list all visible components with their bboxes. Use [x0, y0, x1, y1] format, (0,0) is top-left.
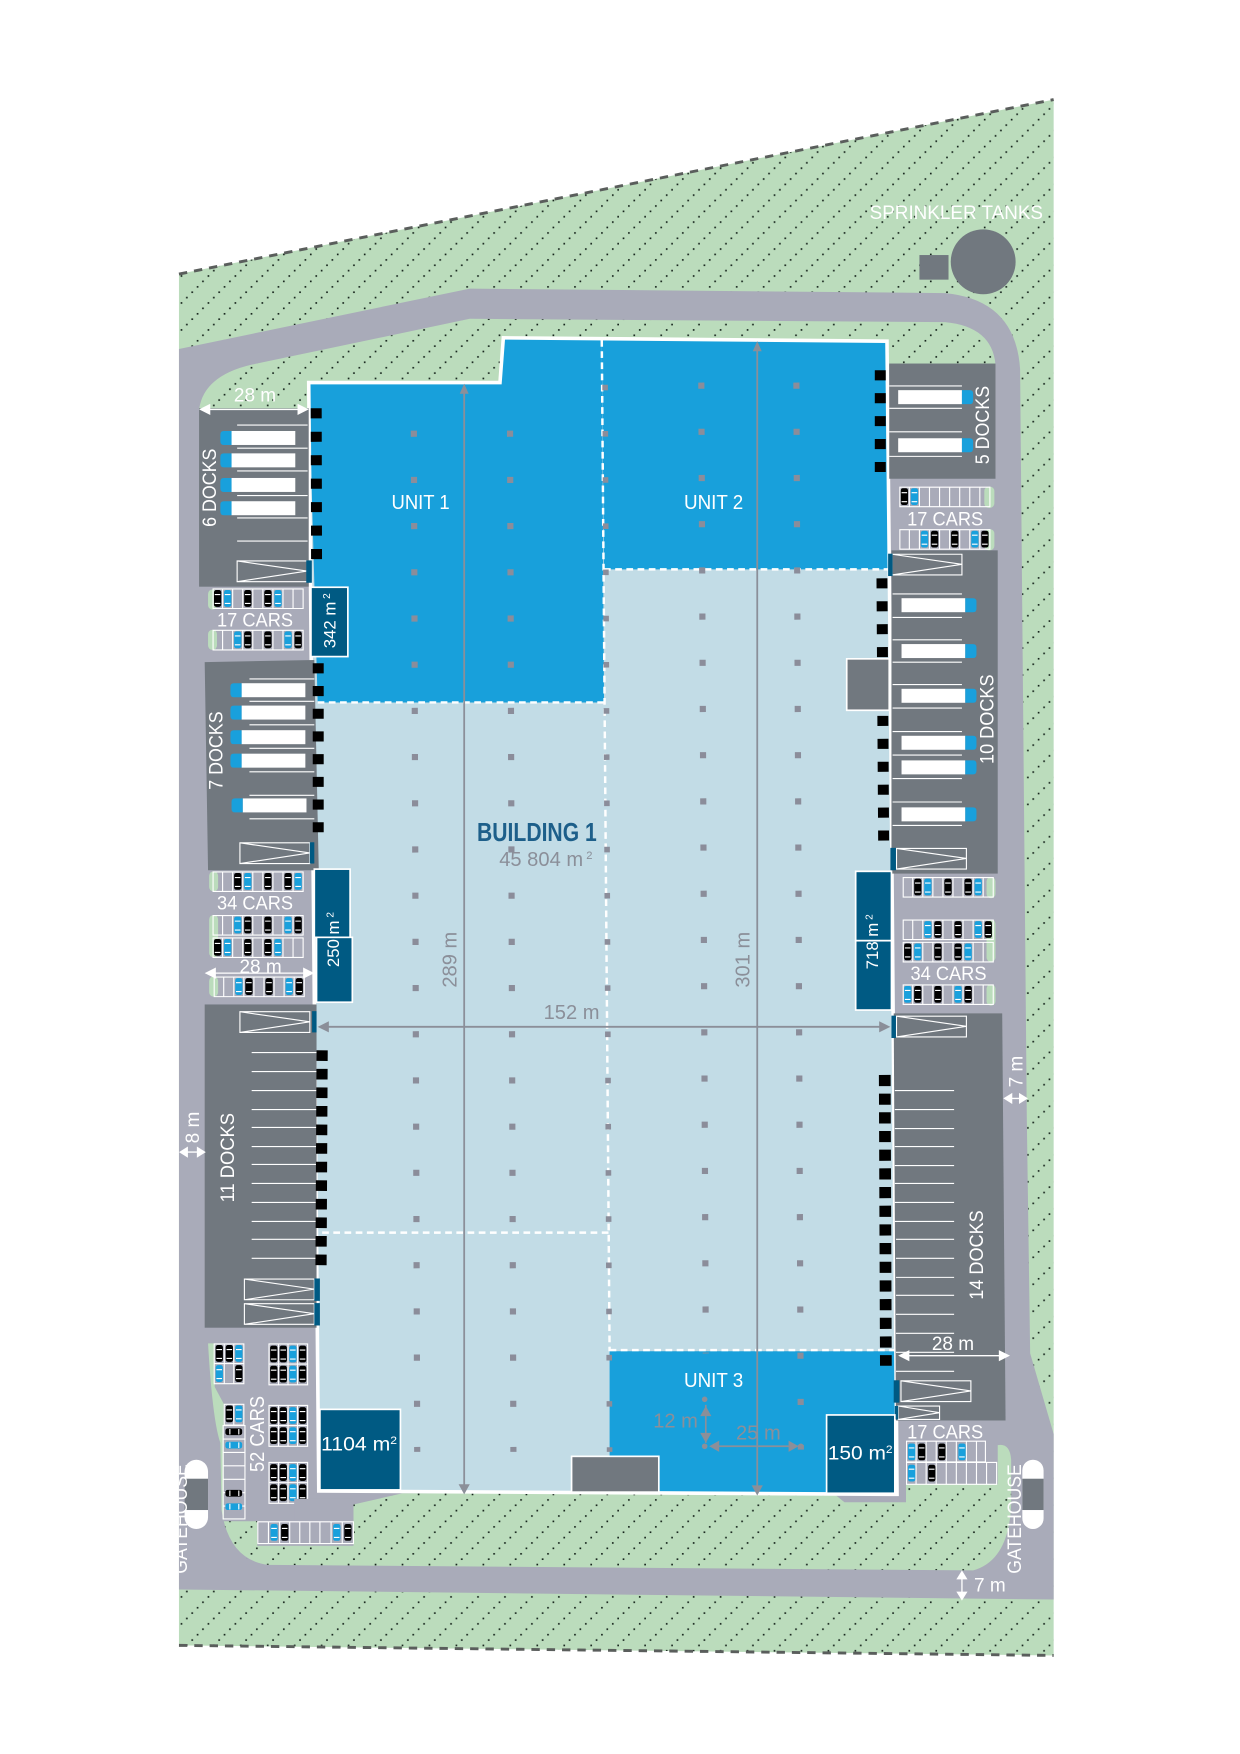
unit 2 area — [602, 339, 889, 569]
building footprint — [309, 338, 897, 1494]
dock block: 6 docks — [199, 408, 312, 587]
office: 150 m2: 2 — [886, 1444, 893, 1456]
label: unit 1: UNIT 1 — [391, 492, 450, 514]
icon: tank — [951, 229, 1016, 294]
label: sprinkler tanks: SPRINKLER TANKS — [870, 203, 1043, 224]
dock block: 14 docks — [891, 1013, 1006, 1421]
gatehouse west — [179, 1460, 208, 1573]
label: 301 m: 301 m — [732, 932, 754, 988]
office: 718 m2 — [856, 871, 891, 1010]
office: 342 m2: 342 m — [321, 602, 340, 648]
dimension lines: 289 m, 301 m, 152 m — [318, 341, 890, 1495]
car park: 52 cars — [214, 1344, 353, 1546]
road width: 7 m south: 7 m — [974, 1576, 1006, 1597]
black dock doors — [316, 370, 886, 1366]
dock block: 7 docks — [205, 660, 319, 870]
label: 7 docks: 7 DOCKS — [207, 711, 228, 790]
label: unit 3: UNIT 3 — [684, 1370, 743, 1392]
label: gatehouse east: GATEHOUSE — [1005, 1464, 1026, 1574]
car park: 17 cars left — [208, 589, 303, 650]
dimension: 28 m left: 28 m — [239, 957, 282, 978]
dimension: 28 m top: 28 m — [234, 386, 276, 407]
inner landscaping north — [199, 319, 995, 447]
label: 6 docks: 6 DOCKS — [200, 449, 221, 527]
dimension: 28 m right — [898, 1334, 1010, 1361]
label: 14 docks: 14 DOCKS — [967, 1210, 988, 1300]
unit 1 area — [309, 338, 604, 702]
road width: 7 m south — [956, 1570, 1006, 1601]
building area: 45 804 m — [499, 849, 583, 871]
label: 17 cars: 17 CARS — [217, 609, 293, 631]
dock block: 5 docks — [889, 364, 995, 479]
unit 3 area — [610, 1351, 897, 1494]
label: 289 m: 289 m — [439, 932, 461, 988]
bay group south — [257, 1499, 353, 1546]
site land with dashed boundary — [179, 100, 1054, 1655]
bay group west — [214, 1344, 244, 1384]
label: 11 docks: 11 DOCKS — [218, 1113, 239, 1202]
inner landscaping south — [208, 1343, 1011, 1570]
gatehouse east — [1005, 1460, 1044, 1574]
building title: BUILDING 1 — [477, 819, 597, 847]
label: 12 m: 12 m — [653, 1410, 698, 1432]
office: 250 m2 — [314, 869, 352, 1002]
label: 52 cars: 52 CARS — [247, 1396, 269, 1472]
bay group vertical — [223, 1404, 245, 1519]
car park: 17 cars right — [900, 487, 994, 550]
road width: 7 m east: 7 m — [1006, 1056, 1027, 1087]
office: 250 m2: 2 — [325, 912, 336, 920]
car park: 17 cars bottom right — [907, 1421, 997, 1484]
grid spacing dimensions — [653, 1397, 804, 1452]
road width: 8 m: 8 m — [183, 1112, 204, 1143]
label: 17 cars: 17 CARS — [907, 509, 983, 531]
dock block: 11 docks — [205, 1004, 320, 1328]
dimension: 28 m top — [199, 386, 309, 415]
car park: 34 cars right — [903, 877, 995, 1006]
office: 1104 m2: 1104 m — [321, 1434, 385, 1456]
office: 250 m2: 250 m — [324, 920, 343, 967]
label: 10 docks: 10 DOCKS — [977, 674, 998, 764]
office: 1104 m2: 2 — [390, 1435, 397, 1447]
plant room east — [847, 659, 889, 710]
perimeter road — [179, 289, 1054, 1600]
label: gatehouse west: GATEHOUSE — [171, 1464, 192, 1574]
dock block: 10 docks — [888, 550, 998, 874]
label: 5 docks: 5 DOCKS — [973, 386, 994, 464]
office: 1104 m2 — [320, 1409, 400, 1490]
water tanks — [870, 203, 1043, 294]
road width: 7 m east — [1003, 1056, 1028, 1104]
road width: 8 m — [179, 1112, 206, 1158]
icon: pump house — [919, 255, 949, 280]
car park: 34 cars left — [209, 871, 304, 997]
label: 34 cars: 34 CARS — [217, 892, 293, 914]
label: 17 cars: 17 CARS — [907, 1421, 983, 1443]
office: 342 m2: 2 — [322, 593, 333, 602]
dimension: 28 m right: 28 m — [932, 1334, 974, 1355]
unit labels — [391, 492, 743, 1392]
office: 150 m2 — [827, 1415, 895, 1493]
plant room south — [572, 1456, 659, 1492]
building area: 2 — [583, 850, 592, 862]
label: 25 m: 25 m — [736, 1423, 781, 1445]
office: 718 m2: 2 — [864, 914, 875, 923]
office: 342 m2 — [311, 587, 348, 657]
label: unit 2: UNIT 2 — [684, 492, 743, 514]
office: 150 m2: 150 m — [828, 1443, 882, 1465]
dimension: 28 m left — [205, 957, 314, 979]
label: 152 m: 152 m — [544, 1002, 600, 1024]
office: 718 m2: 718 m — [863, 923, 882, 969]
label: 34 cars: 34 CARS — [910, 963, 987, 985]
building title — [477, 819, 597, 871]
